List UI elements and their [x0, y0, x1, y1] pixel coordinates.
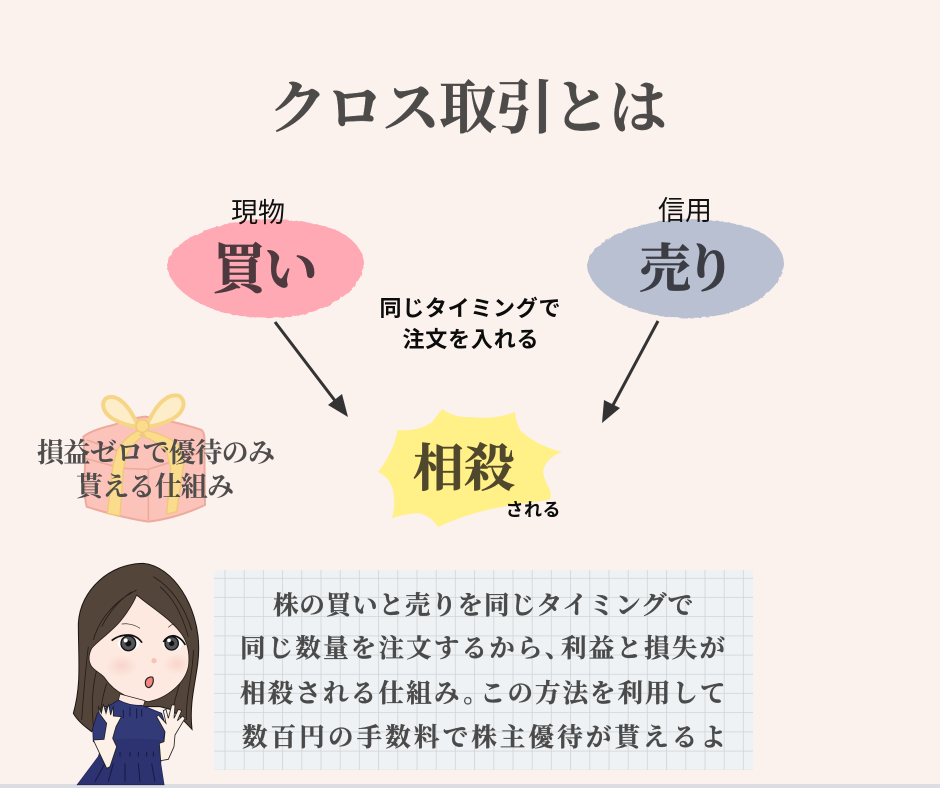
- nose: [151, 658, 157, 663]
- eyes: [118, 637, 139, 651]
- note text: [240, 591, 728, 752]
- note text: 利益と損失が: [561, 634, 727, 663]
- arrow: right: [602, 321, 658, 423]
- dress: [77, 700, 166, 785]
- label: 現物: 現物: [231, 198, 285, 228]
- label: 信用: 信用: [658, 196, 712, 226]
- mouth: [145, 677, 153, 688]
- center note: [380, 296, 560, 352]
- center note: 注文を入れる: [402, 327, 538, 352]
- note text: 相殺される仕組み。: [240, 679, 491, 708]
- left hand and arm: [93, 704, 121, 768]
- note text: 同じ数量を注文するから、: [240, 634, 572, 663]
- arrow: left: [275, 322, 348, 417]
- blush: [106, 655, 138, 677]
- right hand and arm: [157, 705, 185, 761]
- note text: 数百円の手数料で株主優待が貰えるよ: [242, 723, 726, 752]
- brows: [122, 624, 175, 628]
- neck: [118, 694, 145, 706]
- brush ellipse: 売り: [587, 219, 784, 318]
- hair: [73, 563, 199, 732]
- brush ellipse: 買い: 買い: [212, 240, 318, 300]
- face: [89, 595, 189, 702]
- gift caption: 損益ゼロで優待のみ: [37, 438, 275, 468]
- note text: 株の買いと売りを同じタイミングで: [273, 591, 693, 620]
- title: クロス取引とは: [269, 76, 667, 141]
- brush ellipse: 売り: 売り: [639, 242, 736, 299]
- starburst: 相殺: 相殺: [413, 442, 515, 498]
- gift caption: [37, 438, 275, 502]
- character: [73, 563, 199, 785]
- brush ellipse: 買い: [167, 219, 364, 318]
- label: される: される: [506, 500, 560, 520]
- center note: 同じタイミングで: [380, 296, 560, 321]
- gift caption: 貰える仕組み: [76, 472, 234, 502]
- gift box icon: [83, 395, 205, 522]
- note panel: [214, 570, 753, 770]
- starburst: 相殺: [378, 409, 562, 527]
- note text: この方法を利用して: [480, 679, 728, 708]
